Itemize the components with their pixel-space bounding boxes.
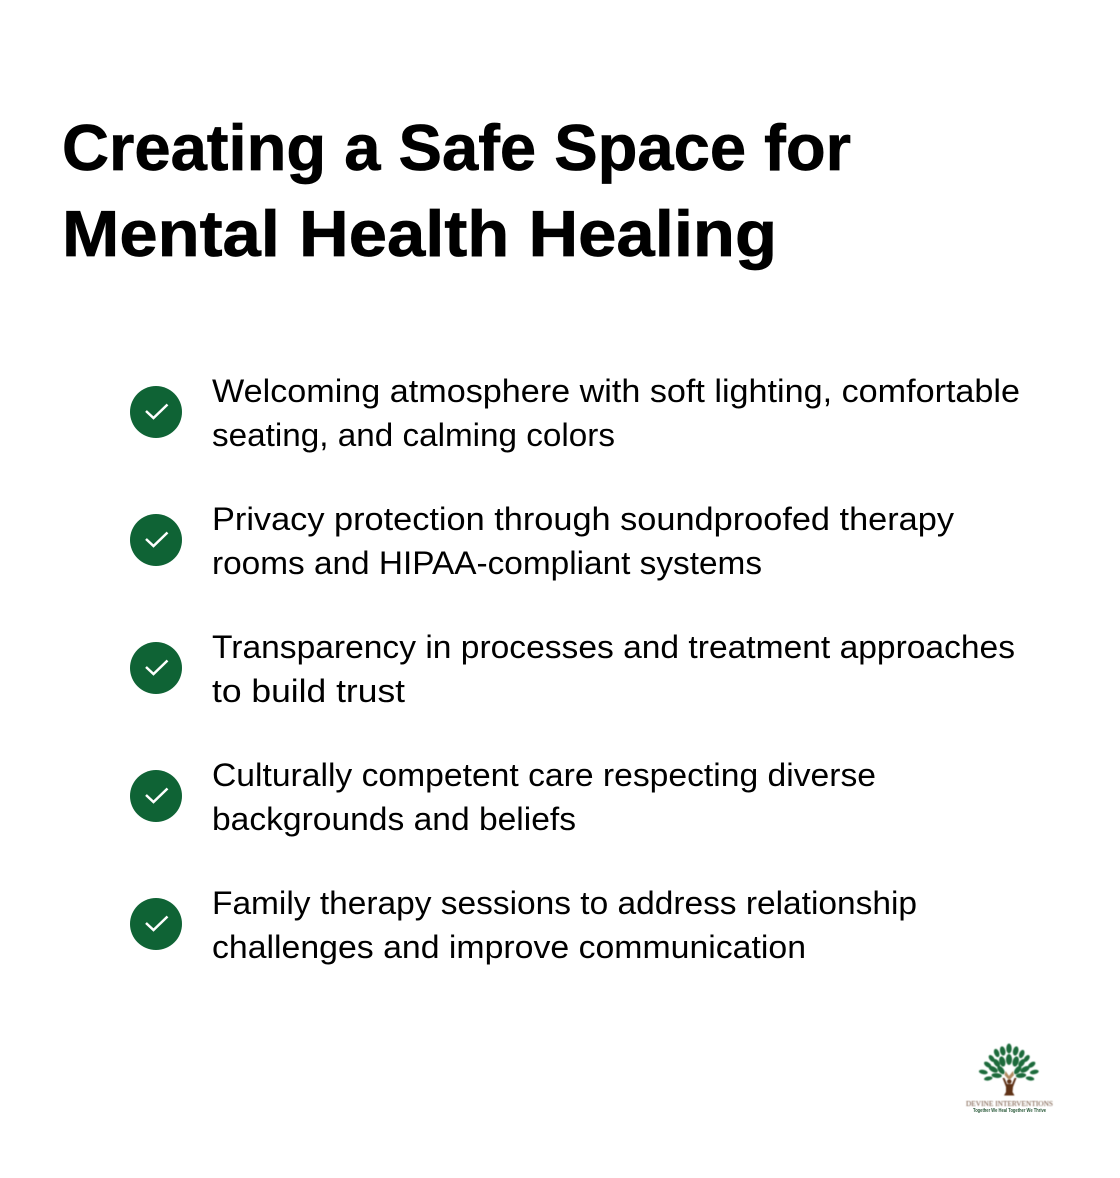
text: culturally competent care: Culturally competent care respecting diverse — [212, 757, 876, 793]
icon: tree leaves — [978, 1044, 1039, 1081]
text: transparency: to build trust — [212, 673, 405, 709]
logo name: DEVINE INTERVENTIONS — [966, 1099, 1053, 1108]
checklist — [130, 373, 1020, 965]
icon: check mark — [130, 514, 182, 566]
text: welcoming atmosphere — [212, 373, 1020, 453]
icon: human figure trunk — [1002, 1071, 1016, 1096]
list item: culturally competent care — [130, 757, 876, 837]
text: culturally competent care: backgrounds and beliefs — [212, 801, 576, 837]
text: family therapy — [212, 885, 917, 965]
title — [62, 111, 851, 270]
list item: transparency — [130, 629, 1015, 709]
text: family therapy: challenges and improve communication — [212, 929, 806, 965]
text: culturally competent care — [212, 757, 876, 837]
text: transparency — [212, 629, 1015, 709]
text: family therapy: Family therapy sessions to address relationship — [212, 885, 917, 921]
text: privacy protection: rooms and HIPAA-compliant systems — [212, 545, 762, 581]
icon: check mark — [130, 770, 182, 822]
list item: welcoming atmosphere — [130, 373, 1020, 453]
text: transparency: Transparency in processes and treatment approaches — [212, 629, 1015, 665]
list item: privacy protection — [130, 501, 954, 581]
title: Creating a Safe Space for — [62, 111, 851, 184]
text: privacy protection: Privacy protection through soundproofed therapy — [212, 501, 954, 537]
text: welcoming atmosphere: seating, and calming colors — [212, 417, 615, 453]
icon: check mark — [130, 642, 182, 694]
list item: family therapy — [130, 885, 917, 965]
logo: Devine Interventions — [966, 1044, 1053, 1114]
text: welcoming atmosphere: Welcoming atmosphere with soft lighting, comfortable — [212, 373, 1020, 409]
icon: check mark — [130, 898, 182, 950]
icon: check mark — [130, 386, 182, 438]
text: privacy protection — [212, 501, 954, 581]
title: Mental Health Healing — [62, 197, 777, 270]
logo tagline: Together We Heal Together We Thrive — [973, 1108, 1046, 1114]
